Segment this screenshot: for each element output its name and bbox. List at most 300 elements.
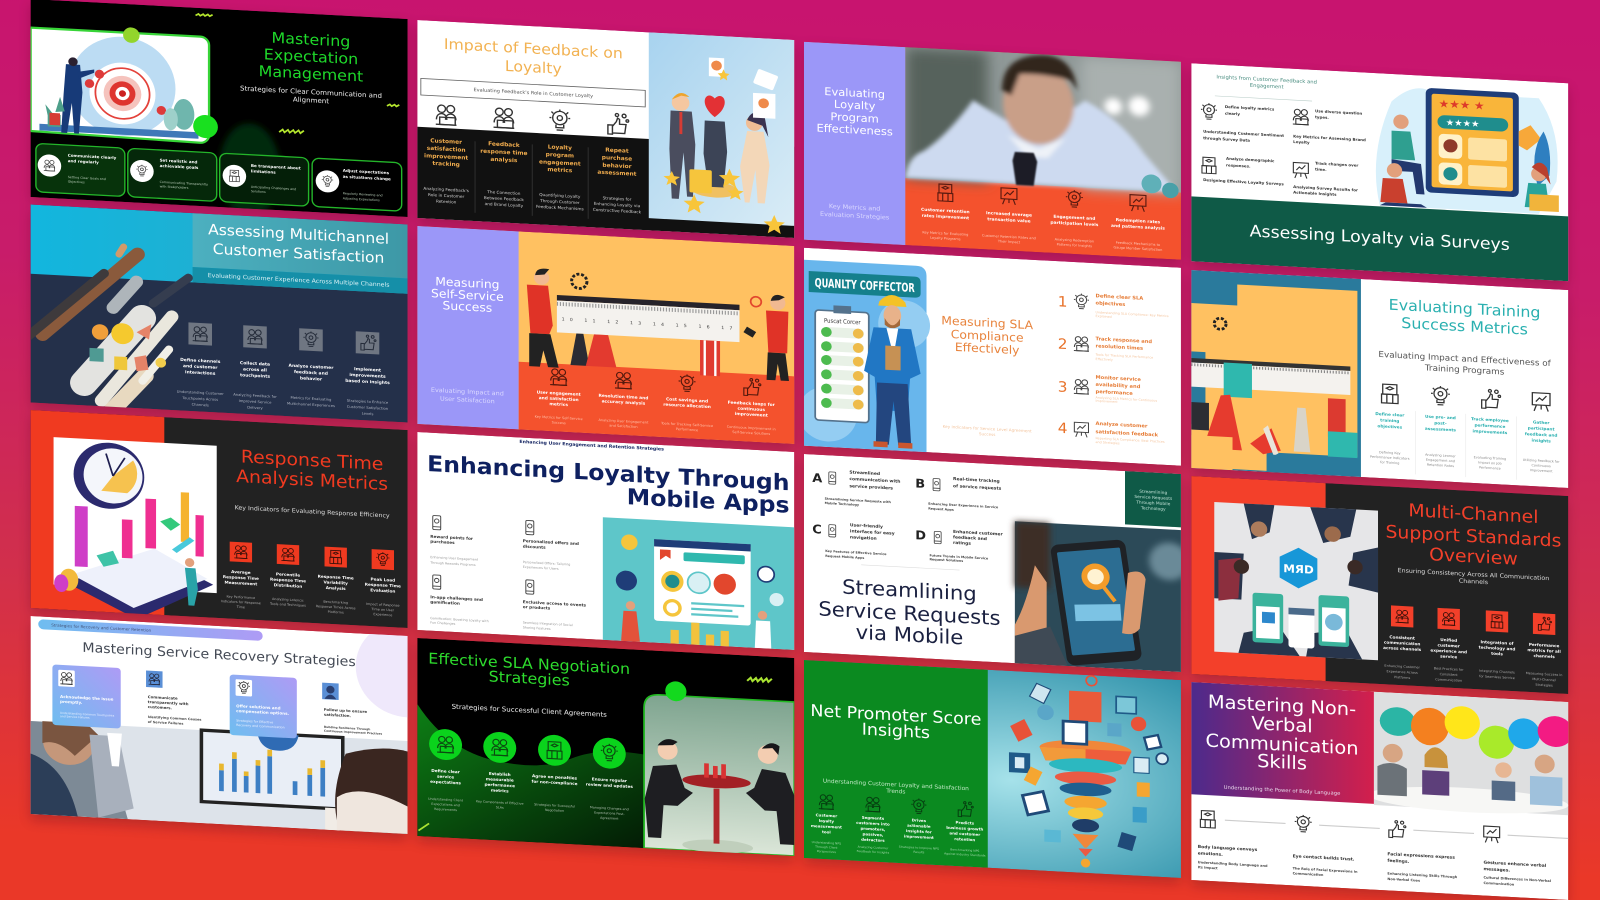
slide: Mastering Service Recovery Strategies <box>31 601 459 837</box>
column descriptions: Measuring Success in <box>1526 671 1562 677</box>
column descriptions: Through Client <box>814 845 838 850</box>
column labels: participation levels <box>1050 220 1099 228</box>
subtitle: User Satisfaction <box>440 396 495 405</box>
title: Loyalty <box>834 98 876 113</box>
column titles: Customer <box>430 138 462 146</box>
list labels: Track response and <box>1096 336 1153 345</box>
column descriptions: Defining Key <box>1379 450 1401 455</box>
column descriptions: Communication <box>1435 677 1462 683</box>
card: acknowledge: promptly. <box>60 699 83 705</box>
header box: Through Mobile <box>1135 500 1171 507</box>
descriptions: Communication <box>1293 871 1324 877</box>
column descriptions: Key Performance <box>226 595 255 600</box>
card 4: Regularly Reviewing and <box>343 191 383 197</box>
column labels: Integration of <box>1480 639 1514 646</box>
icons <box>938 183 1146 212</box>
labels: feelings. <box>1387 858 1410 865</box>
subtitle: Alignment <box>293 96 329 105</box>
column descriptions: Expectations Post- <box>594 811 625 816</box>
column descriptions: Utilizing Feedback for <box>1523 458 1560 464</box>
title: Success Metrics <box>1401 314 1528 338</box>
column labels <box>1383 634 1561 665</box>
feature descriptions: Fun Challenges <box>430 621 456 626</box>
item: communicate: Communicate <box>148 695 178 701</box>
column labels: Agree on penalties <box>532 773 578 781</box>
feature descriptions <box>429 555 573 632</box>
column labels: review and updates <box>586 782 633 789</box>
column labels <box>921 207 1165 232</box>
title: Success <box>442 299 492 315</box>
card 3: Be transparent about <box>251 163 301 171</box>
column labels: Response Time <box>270 577 306 583</box>
column labels: and patterns analysis <box>1111 223 1165 232</box>
column labels: feedback and <box>294 369 328 377</box>
column descriptions: Enhancing Loyalty via <box>594 201 641 208</box>
zigzag accents <box>418 660 772 849</box>
card 3: Solutions <box>251 189 266 194</box>
column descriptions <box>221 594 400 618</box>
heading: Insights from Customer Feedback and <box>1216 75 1317 86</box>
column titles: purchase <box>602 155 632 163</box>
column descriptions: Benchmarking <box>323 600 348 605</box>
column descriptions: Continuous <box>1532 463 1551 468</box>
column labels: performance <box>1474 423 1506 429</box>
column descriptions: Strategies to Improve NPS <box>899 845 939 851</box>
survey items: Key Metrics for Assessing Brand <box>1293 134 1366 142</box>
column descriptions: Understanding NPS <box>812 840 841 846</box>
illustration: ruler and two men: 10 11 12 13 14 15 16 17 <box>562 317 733 332</box>
survey items: clearly <box>1225 111 1240 116</box>
subtitle: Key Metrics and <box>829 203 880 213</box>
survey items: time. <box>1315 167 1327 172</box>
card 3: limitations <box>251 169 276 175</box>
letters: D <box>915 528 926 543</box>
title: Communication <box>1205 731 1359 759</box>
column descriptions: and Brand Loyalty <box>485 201 524 208</box>
title: Strategies <box>489 668 570 690</box>
column labels: Define clear <box>1375 411 1405 418</box>
icons <box>1391 605 1555 635</box>
item labels: ratings <box>953 540 971 547</box>
column descriptions: Feedback for Insights <box>857 849 890 855</box>
title: Assessing Loyalty via Surveys <box>1250 221 1510 254</box>
column descriptions: Strategies to Enhance <box>347 399 389 405</box>
column labels: measurable <box>486 776 514 783</box>
numbers: 2 <box>1058 336 1067 353</box>
column descriptions: Multi-Channel <box>1532 677 1556 682</box>
column labels: insights <box>1532 438 1551 444</box>
feature descriptions: Personalized Offers: Tailoring <box>523 560 570 566</box>
feature descriptions: Seamless Integration of Social <box>523 621 573 627</box>
column labels: detractors <box>861 837 885 843</box>
descriptions: Communication <box>1483 881 1515 887</box>
card: solutions: Recovery and Communication <box>236 723 285 729</box>
column labels: post- <box>1434 420 1447 426</box>
labels: Gestures enhance verbal <box>1483 860 1547 869</box>
card: acknowledge: and Service Failures <box>60 714 90 720</box>
item descriptions <box>825 496 998 567</box>
column descriptions: Against Industry Standards <box>944 852 986 858</box>
column labels: expectations <box>430 779 462 785</box>
item: follow up: Follow up to ensure <box>324 708 368 714</box>
column labels: Gather <box>1533 420 1550 425</box>
card 2: Communicating Transparently <box>160 180 208 186</box>
column labels: Establish <box>489 771 511 777</box>
column descriptions: Indicators for Response <box>221 599 261 605</box>
slide: Evaluating Loyalty Program Effectiveness <box>804 42 1181 260</box>
illustration: mobile app dashboard <box>603 517 794 650</box>
column descriptions: Customer Satisfaction <box>347 405 388 411</box>
subtitle: Ensuring Consistency Across All Communication <box>1398 567 1549 582</box>
illustration: colour-block ruler collage <box>1191 270 1361 477</box>
illustration: rating tablet: ★★★ ★ <box>1439 97 1485 113</box>
column descriptions: Impact of Response <box>366 602 400 608</box>
labels <box>1198 841 1547 875</box>
slide: Streamlining Service Requests via Mobile <box>804 454 1189 672</box>
column labels: and satisfaction <box>539 395 579 403</box>
column titles: engagement <box>539 160 581 168</box>
list descriptions: Improvement <box>1096 399 1118 404</box>
title: Verbal <box>1251 714 1313 737</box>
numbers: 4 <box>1058 420 1067 437</box>
column descriptions: Success <box>552 421 566 425</box>
column descriptions: Analyzing Customer <box>858 845 889 850</box>
header box: Streamlining <box>1139 489 1168 496</box>
column descriptions: Patterns for Insights <box>1057 243 1092 248</box>
illustration: rating tablet: ★★★★ <box>1446 118 1479 130</box>
feature descriptions: Sharing Features <box>523 626 551 631</box>
title: Skills <box>1257 751 1307 774</box>
numbers: 3 <box>1058 379 1067 396</box>
illustration: quality inspector <box>798 259 930 452</box>
column labels: Track employee <box>1471 416 1509 423</box>
photo: meeting around CRM table: MЯD <box>1283 562 1314 577</box>
title: Streamlining <box>842 575 977 605</box>
column labels: Implement <box>354 366 381 374</box>
illustration: ruler and two men <box>527 268 789 381</box>
illustration: rating tablet <box>1376 85 1559 215</box>
column labels: service <box>1440 654 1457 659</box>
column labels: promoters, <box>860 826 886 832</box>
column labels: Increased average <box>986 210 1032 219</box>
column descriptions: Customer Retention Rates and <box>982 234 1036 240</box>
column labels: measurement <box>811 823 842 830</box>
header box: Service Requests <box>1134 494 1173 502</box>
list labels: Analyze customer <box>1096 421 1148 430</box>
column labels: training <box>1380 418 1399 423</box>
card 1 <box>36 143 125 196</box>
feature descriptions: Gamification: Boosting Loyalty with <box>430 616 489 623</box>
item descriptions: Request Apps <box>928 507 954 512</box>
subtitle: Evaluating Customer Experience Across Multiple Channels <box>208 272 389 289</box>
column labels <box>811 812 984 848</box>
column labels: accuracy analysis <box>602 399 646 407</box>
column titles: program <box>546 152 574 159</box>
icons <box>230 542 394 570</box>
column labels: transaction value <box>987 216 1031 225</box>
list labels: Define clear SLA <box>1096 293 1143 302</box>
descriptions: Enhancing Listening Skills Through <box>1387 872 1458 879</box>
column labels: based on insights <box>345 378 390 386</box>
column descriptions: Constructive Feedback <box>593 207 642 214</box>
item: follow up: satisfaction. <box>324 713 352 718</box>
title: Effectively <box>955 340 1020 357</box>
feature labels: purchases <box>430 539 455 545</box>
labels: Eye contact builds trust. <box>1293 853 1355 863</box>
title: Enhancing Loyalty Through <box>427 452 790 496</box>
item: follow up: Building Resilience Through <box>324 725 370 731</box>
column labels: Predicts <box>956 820 975 826</box>
illustration: clock and bar chart <box>54 437 217 623</box>
item labels: Real-time tracking <box>953 476 1000 484</box>
descriptions <box>1198 860 1551 890</box>
green glow ball <box>193 114 218 139</box>
photo: meeting around CRM table <box>1214 502 1378 660</box>
column labels: metrics <box>491 788 509 793</box>
column labels: Drives <box>912 818 927 823</box>
column labels: Variability <box>323 580 348 586</box>
list descriptions: Effectively <box>1096 357 1113 362</box>
photo: team with speech bubbles <box>1368 691 1573 818</box>
column labels: metrics <box>549 401 568 408</box>
survey icons <box>1201 103 1309 179</box>
column labels: Distribution <box>274 582 302 589</box>
column labels: Customer retention <box>921 207 970 215</box>
column labels: User engagement <box>537 390 581 398</box>
title: Mastering Service Recovery Strategies <box>82 640 356 670</box>
column descriptions: Understanding Customer <box>177 390 224 396</box>
column descriptions: Key Metrics for Self-Service <box>535 415 583 421</box>
column descriptions <box>812 840 986 862</box>
column labels: Resolution time and <box>598 393 648 401</box>
slide: Mastering Expectation Management <box>31 0 408 225</box>
card 1: Communicate clearly <box>68 153 117 160</box>
column labels: Peak Load <box>371 577 395 583</box>
title: Support Standards <box>1385 522 1561 552</box>
lavender corner circle <box>356 618 459 720</box>
item labels: of service requests <box>953 483 1002 492</box>
zigzag accents <box>196 14 399 138</box>
feature labels <box>430 533 587 612</box>
item: communicate <box>146 671 201 727</box>
list descriptions: and Strategies <box>1096 440 1120 445</box>
column labels: Evaluation <box>370 588 396 594</box>
lime ball <box>123 27 140 43</box>
column descriptions <box>177 390 389 417</box>
feature descriptions: Enhancing User Engagement <box>430 555 479 562</box>
left purple panel <box>417 226 519 429</box>
title: Measuring <box>435 275 500 292</box>
slide: Effective SLA Negotiation Strategies <box>417 638 794 857</box>
item labels: interface for easy <box>850 528 895 537</box>
column titles: analysis <box>490 157 518 164</box>
column titles <box>424 138 637 178</box>
title: Insights <box>862 719 930 742</box>
card 3: Anticipating Challenges and <box>251 185 296 191</box>
subtitle box: Evaluating Feedback's Role in Customer Loyalty <box>474 87 593 99</box>
column descriptions: Benchmarking NPS <box>950 847 979 853</box>
item labels: Enhanced customer <box>953 529 1004 537</box>
title: Evaluating Training <box>1389 296 1541 322</box>
column descriptions <box>922 230 1162 252</box>
column descriptions: Impact on Job <box>1478 461 1502 466</box>
column descriptions: Experience Across <box>1387 669 1418 675</box>
column descriptions: Levels <box>362 412 374 416</box>
column descriptions: Improved Service <box>239 399 272 405</box>
column labels: improvement <box>904 834 934 840</box>
column labels: rates improvement <box>922 213 969 221</box>
title: Overview <box>1429 545 1518 570</box>
card 1: Setting Clear Goals and <box>68 175 106 181</box>
column labels: assessments <box>1425 426 1457 432</box>
card 4: Adjust expectations <box>343 168 390 175</box>
top pill <box>38 619 263 641</box>
descriptions: Cultural Differences in Non-Verbal <box>1483 876 1551 883</box>
green glow shape <box>417 704 644 848</box>
slide: Assessing Loyalty via Surveys <box>1191 63 1568 281</box>
item descriptions: Enhancing User Experience in Service <box>928 502 998 509</box>
column labels: customers into <box>856 820 890 827</box>
feature labels: Reward points for <box>430 534 473 541</box>
column descriptions: Metrics for Evaluating <box>290 396 331 402</box>
column labels: across channels <box>1383 645 1422 652</box>
subtitle: Key Indicators for Evaluating Response Efficiency <box>235 505 390 520</box>
column labels: Ensure regular <box>592 776 627 783</box>
column descriptions: Engagement and <box>1426 458 1455 463</box>
list descriptions: Explained <box>1096 314 1112 319</box>
small heading: Enhancing User Engagement and Retention Strategies <box>519 439 664 453</box>
survey items: through Survey Data <box>1203 135 1250 143</box>
column descriptions: Agreement <box>600 816 619 821</box>
card: acknowledge: Acknowledge the issue <box>60 694 114 702</box>
survey items: types. <box>1315 114 1329 120</box>
column descriptions: Evaluating Training <box>1474 455 1506 461</box>
title: Self-Service <box>431 287 504 304</box>
feature labels: Exclusive access to events <box>523 599 587 607</box>
feature descriptions: Through Rewards Programs <box>429 561 476 567</box>
survey items: Track changes over <box>1315 161 1358 168</box>
column descriptions: Feedback Mechanisms to <box>1116 241 1160 247</box>
column titles: Loyalty <box>548 145 572 152</box>
item: communicate: customers. <box>148 705 173 710</box>
column titles: Repeat <box>605 148 629 155</box>
column descriptions: SLAs <box>496 805 504 810</box>
item icons <box>829 472 941 544</box>
column labels: behavior <box>300 376 323 383</box>
title: Analysis Metrics <box>236 467 388 495</box>
labels: Body language conveys <box>1198 844 1258 853</box>
item: communicate: transparently with <box>148 700 189 706</box>
column descriptions: Analyzing User Engagement <box>599 418 649 425</box>
list labels: resolution times <box>1096 343 1143 352</box>
survey items: Actionable Insights <box>1293 190 1337 197</box>
column descriptions: Managing Changes and <box>590 805 629 811</box>
column descriptions: Performance <box>1479 466 1501 471</box>
subtitle: Understanding the Power of Body Language <box>1224 785 1340 797</box>
column descriptions: Platforms <box>1394 675 1411 680</box>
column descriptions: Negotiation <box>545 808 564 813</box>
feature descriptions: Experiences for Users <box>523 565 559 571</box>
column descriptions: Continuous Improvement in <box>727 425 776 431</box>
icon row <box>436 103 629 135</box>
icons <box>1200 809 1500 843</box>
column descriptions: Enhancing Customer <box>1384 664 1421 670</box>
column descriptions: Through Customer <box>539 198 580 205</box>
feature labels: or products <box>523 604 551 611</box>
item descriptions: Request Solutions <box>929 557 963 563</box>
column descriptions: Strategies <box>1535 683 1553 688</box>
slide: Response Time Analysis Metrics <box>31 410 408 634</box>
subtitle: Strategies for Successful Client Agreements <box>452 703 607 719</box>
list descriptions <box>1095 310 1169 448</box>
labels: emotions. <box>1198 851 1223 858</box>
card: solutions: Strategies for Effective <box>236 719 273 724</box>
column descriptions: Experience <box>373 612 392 617</box>
title: Customer Satisfaction <box>213 240 384 267</box>
column labels: improvements <box>1473 428 1508 435</box>
column descriptions: Improvement <box>1530 468 1553 473</box>
photo: hand holding phone <box>1015 521 1189 672</box>
slide: Mastering Non-Verbal Communication Skills <box>1191 682 1573 900</box>
subtitle: Training Programs <box>1424 364 1505 378</box>
title: Service Requests <box>818 597 1001 630</box>
card 2: achievable goals <box>160 163 199 170</box>
photo: businessman <box>905 47 1181 199</box>
feature labels: Personalized offers and <box>523 538 579 546</box>
title: Impact of Feedback on <box>444 35 623 62</box>
column descriptions: Expectations and <box>431 802 460 807</box>
column labels: passives, <box>862 831 884 837</box>
column descriptions <box>535 415 776 436</box>
footer band <box>1191 196 1568 281</box>
column labels: Engagement and <box>1053 214 1095 222</box>
descriptions: Its Impact <box>1198 865 1218 870</box>
column labels: Analyze customer <box>289 363 334 371</box>
illustration: quality inspector: QUANLTY COFFECTOR <box>815 275 915 295</box>
column labels <box>537 390 776 419</box>
column descriptions: Perspectives <box>817 849 836 854</box>
column descriptions: Performance Indicators <box>1370 455 1410 461</box>
feature labels: In-app challenges and <box>430 594 483 602</box>
list labels: performance <box>1096 389 1133 397</box>
green ball <box>665 681 686 702</box>
column labels: resource allocation <box>663 402 711 410</box>
card 4: as situations change <box>343 174 391 181</box>
column labels: Measurement <box>225 580 257 586</box>
column descriptions: Role in Customer <box>428 192 465 199</box>
column labels: experience and <box>1430 648 1467 654</box>
title: Loyalty <box>505 57 562 78</box>
column labels <box>1375 411 1558 444</box>
feature icons <box>433 515 534 594</box>
column labels: Collect data <box>240 360 270 368</box>
column descriptions: Analyzing Redemption <box>1055 237 1094 243</box>
item labels: Streamlined <box>849 470 880 477</box>
card: acknowledge <box>52 664 121 729</box>
column titles: metrics <box>547 167 573 174</box>
column labels: Response Time <box>318 574 354 580</box>
column descriptions: Response Times Across <box>316 604 356 610</box>
survey items: responses. <box>1226 162 1251 169</box>
slide: Enhancing Loyalty Through Mobile Apps <box>417 432 794 650</box>
column titles: satisfaction <box>427 146 466 154</box>
column titles: Feedback <box>488 141 520 149</box>
column descriptions: Requirements <box>434 807 457 812</box>
column labels: Response Time <box>223 574 259 581</box>
column labels: Percentile <box>276 572 300 578</box>
list descriptions: Understanding SLA Compliance: Key Metrics <box>1096 310 1169 318</box>
column labels: actionable <box>907 823 931 829</box>
